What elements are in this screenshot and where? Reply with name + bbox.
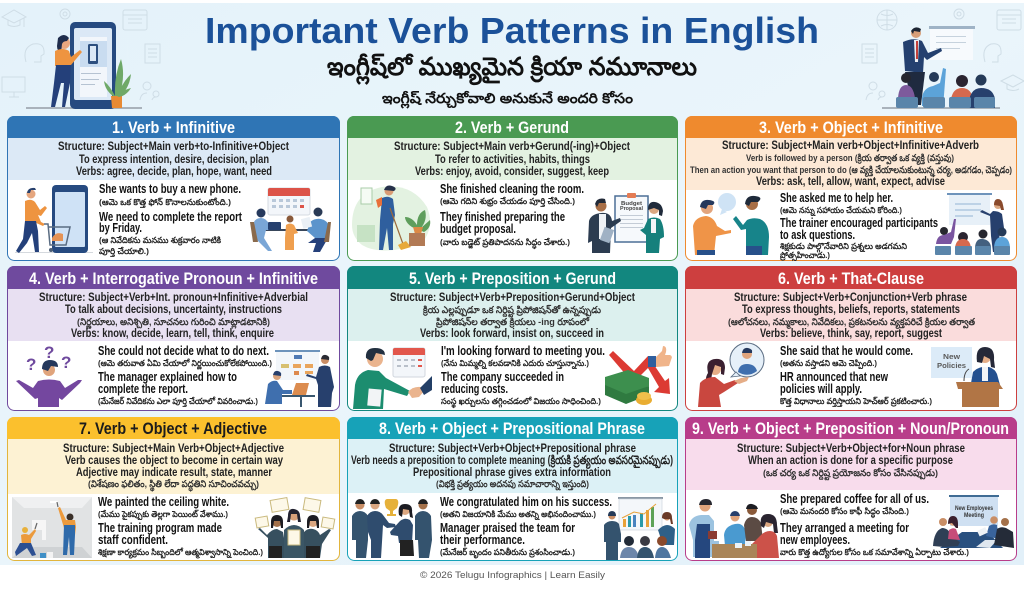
panel 9 examples: వారు కొత్త ఉద్యోగుల కోసం ఒక సమావేశాన్ని ఏర్పాటు చేశారు.) [780, 547, 969, 559]
panel 7 examples: The training program made [98, 521, 222, 535]
illustration: presenter with audience [882, 26, 1000, 109]
panel 8 examples: We congratulated him on his success. [440, 495, 612, 509]
panel 2 examples: They finished preparing the [440, 210, 565, 224]
panel 1 rules: Structure: Subject+Main verb+to-Infinitive+Object [58, 139, 289, 153]
panel 5 examples: (నేను మిమ్మల్ని కలవడానికి ఎదురు చూస్తున్నాను.) [441, 358, 589, 370]
panel 1 examples: పూర్తి చేయాలి.) [99, 246, 149, 257]
panel 1 examples: (ఆమె ఒక కొత్త ఫోన్ కొనాలనుకుంటోంది.) [99, 197, 231, 208]
panel 6 examples: కొత్త విధానాలు వర్తిస్తాయని హెచ్ఆర్ ప్రకటించారు.) [779, 396, 932, 407]
panel 2 examples: budget proposal. [440, 222, 516, 236]
panel 4 rules: (నిర్ణయాలు, అనిశ్చితి, సూచనలు గురించి మాట్లాడటానికి) [77, 317, 270, 329]
panel 5 rules: క్రియ ఎల్లప్పుడూ ఒక నిర్దిష్ట ప్రిపోజిషన్‌తో ఉన్నప్పుడు [422, 304, 602, 317]
panel 9 rules: When an action is done for a specific purpose [748, 453, 953, 467]
panel 1 rules: To express intention, desire, decision, plan [79, 152, 269, 166]
panel 5: verb + preposition + gerund [347, 266, 678, 410]
panel 1 examples: by Friday. [99, 221, 142, 235]
panel 6 rules [728, 290, 976, 340]
panel 4: verb + interrogative pronoun + infinitive [7, 266, 340, 410]
icon: trainer and audience [935, 193, 1010, 255]
panel 6 rules: To express thoughts, beliefs, reports, statements [742, 302, 960, 316]
panel 1 rules [58, 139, 289, 178]
panel 6 heading: 6. Verb + That-Clause [778, 269, 924, 288]
panel 2 rules [394, 139, 630, 178]
panel 8 examples: (మేనేజర్ బృందం పనితీరును ప్రశంసించాడు.) [440, 547, 575, 559]
panel 2 examples: (ఆమె గదిని శుభ్రం చేయడం పూర్తి చేసింది.) [440, 196, 575, 207]
panel 6 examples: (అతను వస్తాడని ఆమె చెప్పింది.) [780, 358, 877, 370]
panel 9: verb + object + preposition + noun/pronoun [685, 417, 1017, 560]
icon: man with shopping cart and phone [15, 185, 93, 253]
icon: manager explaining chart [265, 350, 334, 407]
panel 1 examples: She wants to buy a new phone. [99, 182, 241, 196]
panel 7 examples: (మేము పైకప్పుకు తెల్లగా పెయింట్ వేశాము.) [98, 509, 228, 521]
icon: presentation with bar chart [604, 497, 675, 560]
icon: team with trophy [352, 499, 432, 558]
panel 7 examples: శిక్షణా కార్యక్రమం సిబ్బందిలో ఆత్మవిశ్వాసాన్ని పెంచింది.) [98, 547, 263, 559]
icon: new employees meeting [933, 495, 1014, 548]
panel 6 rules: Verbs: believe, think, say, report, suggest [760, 326, 942, 340]
panel 4 rules: Verbs: know, decide, learn, tell, think, enquire [71, 326, 274, 340]
panel 7 examples: We painted the ceiling white. [98, 495, 229, 509]
icon: coffee served to friends [689, 499, 779, 558]
panel 8 examples: Manager praised the team for [440, 521, 575, 535]
panel 6 examples: She said that he would come. [780, 344, 913, 358]
panel 3 examples [779, 191, 938, 262]
panel 7 rules [63, 441, 284, 492]
panel 3 examples: ప్రోత్సహించాడు.) [779, 250, 830, 262]
panel 9 rules [737, 441, 965, 480]
panel 4 rules [39, 290, 308, 340]
panel 9 examples [780, 492, 969, 559]
panel 5 examples: I'm looking forward to meeting you. [441, 344, 605, 358]
icon: man shaking hands with calendar [353, 348, 432, 409]
panel 2 rules: Verbs: enjoy, avoid, consider, suggest, keep [415, 164, 609, 178]
panel 1 heading: 1. Verb + Infinitive [112, 118, 235, 137]
panel 6 examples [779, 344, 932, 407]
icon: budget proposal discussion: Proposal [620, 206, 644, 212]
panel 4 examples [98, 344, 272, 407]
panel 3 examples: to ask questions. [780, 228, 855, 242]
panel 4 examples: (మేనేజర్ నివేదికను ఎలా పూర్తి చేయాలో వివరించాడు.) [98, 396, 258, 407]
panel 8 rules [351, 441, 673, 491]
panel 8 examples: (అతని విజయానికి మేము అతన్ని అభినందించాము.) [440, 509, 596, 521]
panel 5 examples [441, 344, 605, 409]
icon: new policies announcement [931, 347, 1003, 407]
panel 7 heading: 7. Verb + Object + Adjective [79, 419, 267, 438]
icon: budget proposal discussion [588, 193, 664, 253]
panel 6: verb + that-clause [685, 266, 1017, 410]
panel 2 heading: 2. Verb + Gerund [455, 118, 569, 137]
panel 4 heading: 4. Verb + Interrogative Pronoun + Infinitive [29, 269, 318, 288]
panel 9 examples: new employees. [780, 533, 850, 547]
icon: confused person with question marks: ? [26, 355, 36, 374]
panel 6 rules: Structure: Subject+Verb+Conjunction+Verb phrase [734, 290, 967, 304]
panel 7 examples: staff confident. [98, 533, 168, 547]
panel 3 rules [690, 138, 1012, 188]
panel 4 examples: The manager explained how to [98, 370, 237, 384]
icon: woman with thought bubble [698, 343, 764, 407]
panel 1 examples [99, 182, 243, 257]
icon: new employees meeting: Meeting [964, 512, 984, 519]
panel 7 rules: Adjective may indicate result, state, manner [76, 465, 272, 479]
panel 7 examples [98, 495, 263, 559]
icon: new employees meeting: New Employees [955, 505, 993, 512]
icon: budget proposal discussion: Budget [621, 201, 642, 207]
panel 1 examples: (ఆ నివేదికను మనము శుక్రవారం నాటికి [99, 235, 222, 246]
panel 7 rules: (విశేషణం ఫలితం, స్థితి లేదా పద్ధతిని సూచించవచ్చు) [88, 478, 259, 492]
panel 1 rules: Verbs: agree, decide, plan, hope, want, need [76, 164, 272, 178]
panel 3 examples: శిక్షకుడు పాల్గొనేవారిని ప్రశ్నలు అడగమని [780, 241, 907, 253]
panel 9 examples: They arranged a meeting for [780, 521, 909, 535]
panel 3 rules: Verb is followed by a person (క్రియ తర్వాత ఒక వ్యక్తి (వస్తువు) [746, 153, 954, 165]
panel 6 examples: HR announced that new [780, 370, 888, 384]
panel 4 examples: She could not decide what to do next. [98, 344, 269, 358]
panel 8: verb + object + prepositional phrase [347, 417, 678, 560]
panel 1 examples: We need to complete the report [99, 210, 243, 224]
panel 8 rules: Prepositional phrase gives extra information [413, 465, 611, 479]
panel 4 examples: (ఆమె తరువాత ఏమి చేయాలో నిర్ణయించుకోలేకపోయింది.) [98, 358, 272, 370]
panel 4 rules: To talk about decisions, uncertainty, instructions [65, 302, 282, 316]
panel 9 examples: (ఆమె మనందరి కోసం కాఫీ సిద్ధం చేసింది.) [780, 506, 909, 519]
panel 3 examples: The trainer encouraged participants [780, 216, 938, 230]
panel 2 rules: To refer to activities, habits, things [435, 152, 590, 166]
panel 5 rules: Structure: Subject+Verb+Preposition+Gerund+Object [390, 290, 635, 304]
icon: confused person with question marks: ? [61, 353, 71, 372]
panel 6 examples: policies will apply. [780, 382, 862, 396]
icon: team meeting with calendar [250, 188, 331, 252]
panel 5 rules: ప్రిపోజిషన్‌ల తర్వాత క్రియలు -ing రూపంలో [436, 316, 590, 329]
icon: two people talking [693, 193, 769, 255]
panel 3 rules: Verbs: ask, tell, allow, want, expect, advise [756, 174, 945, 188]
icon: confused person with question marks: ? [44, 343, 54, 362]
icon: woman sweeping [352, 186, 430, 251]
panel 8 rules: Structure: Subject+Verb+Object+Prepositional phrase [389, 441, 636, 455]
panel 4 examples: complete the report. [98, 382, 188, 396]
panel 6 rules: (ఆలోచనలు, నమ్మకాలు, నివేదికలు, ప్రకటనలను వ్యక్తపరిచే క్రియల తర్వాత [728, 316, 976, 329]
illustration: woman with phone [26, 22, 142, 109]
panel 3 heading: 3. Verb + Object + Infinitive [759, 118, 943, 137]
icon: new policies announcement: Policies [937, 361, 966, 370]
panel 8 examples [440, 495, 612, 559]
Telugu subtitle: ఇంగ్లీష్‌లో ముఖ్యమైన క్రియా నమూనాలు [327, 53, 697, 86]
panel 5 rules: Verbs: look forward, insist on, succeed in [420, 326, 604, 340]
panel 8 rules: (విభక్తి ప్రత్యయం అదనపు సమాచారాన్ని ఇస్తుంది) [436, 479, 589, 491]
panel 8 examples: their performance. [440, 533, 525, 547]
panel 2 examples: (వారు బడ్జెట్ ప్రతిపాదనను సిద్ధం చేశారు.) [440, 237, 570, 250]
panel 4 rules: Structure: Subject+Verb+Int. pronoun+Infinitive+Adverbial [39, 290, 308, 304]
panel 7 rules: Structure: Subject+Main Verb+Object+Adjective [63, 441, 284, 455]
panel 2 examples: She finished cleaning the room. [440, 182, 584, 196]
panel 5 examples: సంస్థ ఖర్చులను తగ్గించడంలో విజయం సాధించింది.) [441, 396, 601, 409]
panel 7: verb + object + adjective [7, 417, 340, 560]
icon: new policies announcement: New [943, 352, 960, 361]
panel 8 heading: 8. Verb + Object + Prepositional Phrase [379, 419, 645, 438]
panel 5 rules [390, 290, 635, 340]
panel 1: verb + infinitive [7, 116, 340, 260]
panel 9 rules: (ఒక చర్య ఒక నిర్దిష్ట ప్రయోజనం కోసం చేసినప్పుడు) [763, 467, 938, 480]
icon: three women with certificates [255, 498, 335, 558]
panel 9 rules: Structure: Subject+Verb+Object+for+Noun phrase [737, 441, 965, 455]
panel 3 examples: (ఆమె నన్ను సహాయం చేయమని కోరింది.) [780, 205, 902, 217]
panel 3 examples: She asked me to help her. [780, 191, 893, 205]
panel 8 rules: Verb needs a preposition to complete meaning (క్రియకి ప్రత్యయం అవసరమైనప్పుడు) [351, 453, 673, 469]
panel 7 rules: Verb causes the object to become in certain way [65, 453, 283, 467]
title: Important Verb Patterns in English [205, 10, 819, 51]
panel 2 examples [440, 182, 584, 250]
panel 5 heading: 5. Verb + Preposition + Gerund [409, 269, 616, 288]
footer: © 2026 Telugu Infographics | Learn Easily [420, 570, 605, 581]
Telugu tagline: ఇంగ్లీష్ నేర్చుకోవాలి అనుకునే అందరి కోసం [382, 90, 633, 109]
panel 9 examples: She prepared coffee for all of us. [780, 492, 929, 506]
icon: painters in room [12, 497, 92, 558]
panel 3: verb + object + infinitive [685, 116, 1017, 262]
panel 5 examples: The company succeeded in [441, 370, 564, 384]
panel 5 examples: reducing costs. [441, 382, 508, 396]
panel 2: verb + gerund [347, 116, 678, 260]
icon: falling cost arrow, thumbs up, money [605, 346, 672, 405]
panel 2 rules: Structure: Subject+Main verb+Gerund(-ing)+Object [394, 139, 630, 153]
icon: confused person with question marks [16, 343, 82, 407]
